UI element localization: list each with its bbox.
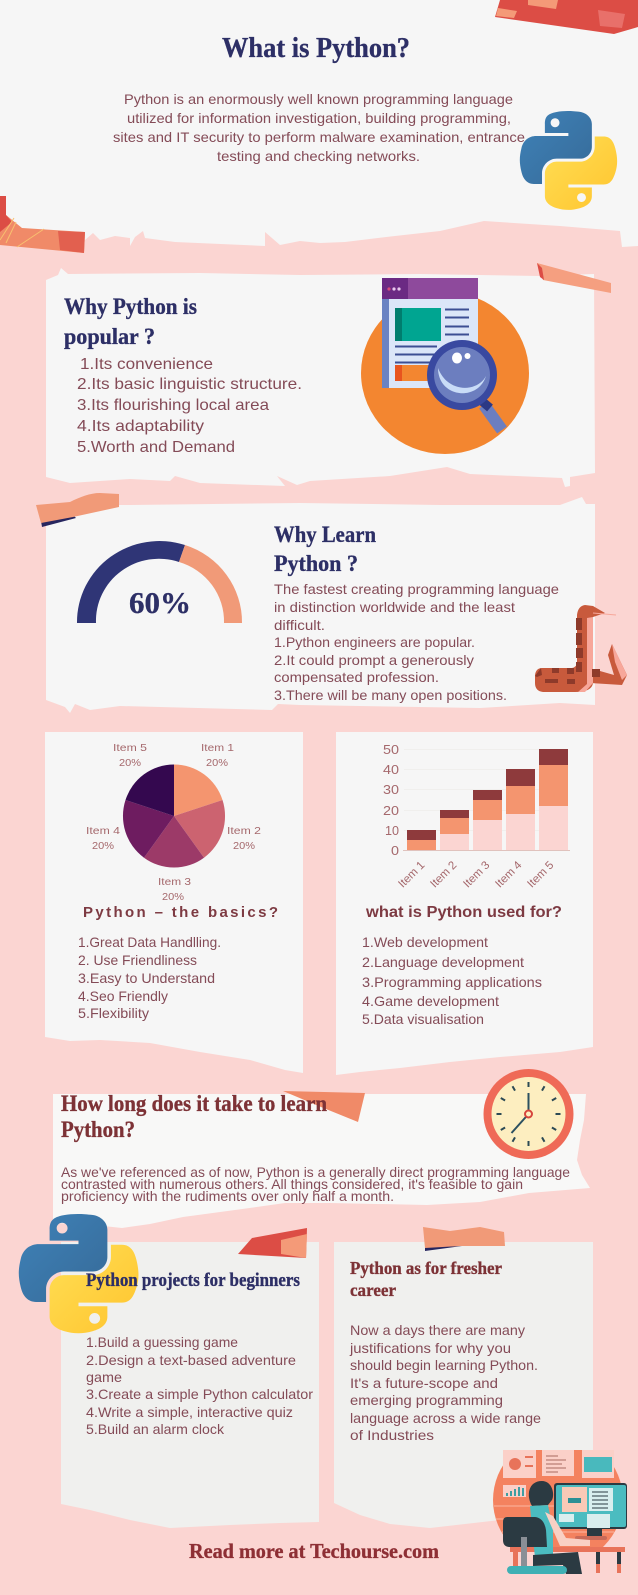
heading: [64, 294, 197, 349]
body text: 3.There will be many open positions.: [274, 687, 507, 703]
y axis labels: 50: [383, 742, 399, 757]
x axis labels: Item 5: [525, 859, 556, 890]
decoration: red torn tape top right: [495, 0, 638, 34]
pie labels: 20%: [162, 891, 184, 903]
x axis labels: Item 4: [493, 859, 525, 890]
gauge: 60%: [77, 541, 242, 623]
body text: emerging programming: [350, 1392, 503, 1408]
list: [362, 934, 542, 1027]
list: 4.Game development: [362, 993, 499, 1009]
y axis labels: [383, 742, 399, 858]
icon: snake: [535, 605, 627, 692]
intro paragraph: testing and checking networks.: [217, 148, 420, 164]
list: 2.Its basic linguistic structure.: [77, 376, 302, 393]
list: 1.Its convenience: [80, 356, 213, 373]
body text: compensated profession.: [274, 669, 439, 685]
heading: career: [350, 1280, 396, 1300]
list: beginner projects: [86, 1334, 313, 1437]
pie labels: Item 5: [113, 742, 147, 754]
decoration: peach tape: [537, 263, 611, 293]
x axis labels: [396, 859, 556, 890]
y axis labels: 10: [385, 823, 399, 838]
body text: It's a future-scope and: [350, 1375, 498, 1391]
list: 5.Worth and Demand: [77, 439, 235, 456]
list: 4.Its adaptability: [77, 418, 204, 435]
pie labels: Item 1: [201, 742, 234, 754]
list: beginner projects: 5.Build an alarm clock: [86, 1421, 225, 1437]
stacked bar chart: [383, 742, 570, 890]
panel: why Python is popular: [46, 263, 611, 487]
body text: justifications for why you: [349, 1340, 511, 1356]
illustration: person at computer: [493, 1450, 627, 1574]
body text: 2.It could prompt a generously: [274, 652, 474, 668]
body text: in distinction worldwide and the least: [274, 599, 515, 615]
body text: should begin learning Python.: [350, 1357, 538, 1373]
list: 3.Easy to Understand: [78, 970, 215, 986]
list: 1.Web development: [362, 934, 488, 950]
heading: popular ?: [64, 324, 155, 349]
icon: python logo large: [19, 1214, 138, 1333]
body text: [349, 1322, 541, 1443]
pie labels: [86, 742, 261, 903]
heading: Python as for fresher: [350, 1258, 502, 1278]
icon: clock: [484, 1069, 574, 1159]
y axis labels: 20: [383, 803, 399, 818]
panel: what is Python: [0, 0, 638, 253]
x axis labels: Item 2: [428, 859, 459, 890]
y axis labels: 40: [383, 762, 399, 777]
body text: [61, 1164, 570, 1204]
heading: Python ?: [274, 551, 358, 576]
panel: why learn Python: [36, 493, 627, 713]
intro paragraph: sites and IT security to perform malware examination, entrance: [113, 129, 525, 145]
heading: what is Python used for?: [365, 904, 562, 921]
pie chart: [86, 742, 261, 903]
panel: what is Python used for: [336, 732, 593, 1075]
panel: how long does it take: [53, 1069, 590, 1228]
heading: Python – the basics?: [83, 904, 278, 921]
heading: Python?: [61, 1117, 135, 1142]
list: 3.Its flourishing local area: [77, 397, 269, 414]
list: beginner projects: 3.Create a simple Python calculator: [86, 1386, 313, 1402]
body text: 1.Python engineers are popular.: [274, 634, 475, 650]
body text: [274, 581, 559, 703]
x axis labels: Item 1: [396, 859, 427, 890]
list: beginner projects: 2.Design a text-based adventure: [86, 1352, 296, 1368]
intro paragraph: Python is an enormously well known programming language: [124, 91, 513, 107]
heading: Why Learn: [274, 522, 376, 547]
list: [78, 934, 221, 1021]
decoration: orange tape left: [0, 196, 85, 253]
gauge: 60%: 60%: [129, 585, 191, 620]
body text: Now a days there are many: [350, 1322, 525, 1338]
list: [77, 356, 302, 456]
x axis labels: Item 3: [461, 859, 492, 890]
heading: [350, 1258, 502, 1300]
icon: document and magnifier on orange circle: [361, 278, 529, 454]
list: 5.Data visualisation: [362, 1011, 484, 1027]
list: beginner projects: 4.Write a simple, interactive quiz: [86, 1404, 293, 1420]
heading: Why Python is: [64, 294, 197, 319]
list: 2. Use Friendliness: [78, 952, 197, 968]
title: What is Python?: [222, 32, 410, 64]
footer link text: Read more at Techourse.com: [189, 1539, 439, 1563]
pie labels: Item 3: [158, 876, 191, 888]
pie labels: Item 4: [86, 825, 120, 837]
list: 4.Seo Friendly: [78, 988, 168, 1004]
list: beginner projects: 1.Build a guessing game: [86, 1334, 238, 1350]
pie labels: 20%: [233, 840, 255, 852]
decoration: red tape: [238, 1228, 307, 1258]
body text: As we've referenced as of now, Python is a generally direct programming language: [61, 1164, 570, 1180]
decoration: peach tape: [283, 1091, 365, 1122]
decoration: peach tape: [423, 1227, 505, 1251]
list: 3.Programming applications: [362, 974, 542, 990]
decoration: peach tape: [36, 493, 119, 527]
heading: [274, 522, 376, 576]
heading: [61, 1091, 327, 1142]
icon: python logo: [520, 111, 617, 210]
body text: proficiency with the rudiments over only half a month.: [61, 1188, 394, 1204]
list: 5.Flexibility: [78, 1005, 149, 1021]
body text: contrasted with numerous others. All things considered, it's feasible to gain: [61, 1176, 523, 1192]
pie labels: 20%: [92, 840, 114, 852]
heading: How long does it take to learn: [61, 1091, 327, 1116]
pie labels: 20%: [119, 757, 141, 769]
intro paragraph: utilized for information investigation, building programming,: [127, 110, 511, 126]
body text: of Industries: [350, 1427, 434, 1443]
y axis labels: 30: [383, 782, 399, 797]
intro paragraph: [113, 91, 525, 164]
heading: Python projects for beginners: Python projects for beginners: [86, 1271, 300, 1291]
bars: [407, 749, 568, 850]
pie labels: Item 2: [227, 825, 261, 837]
panel: Python the basics: [45, 732, 303, 1073]
panel: Python as for fresher career: [334, 1227, 593, 1528]
body text: The fastest creating programming language: [274, 581, 559, 597]
y axis labels: 0: [391, 843, 399, 858]
list: 1.Great Data Handlling.: [78, 934, 221, 950]
panel: Python projects for beginners: [61, 1228, 319, 1528]
list: 2.Language development: [362, 954, 524, 970]
body text: difficult.: [274, 617, 325, 633]
list: beginner projects: game: [86, 1369, 122, 1385]
pie labels: 20%: [206, 757, 228, 769]
body text: language across a wide range: [350, 1410, 541, 1426]
